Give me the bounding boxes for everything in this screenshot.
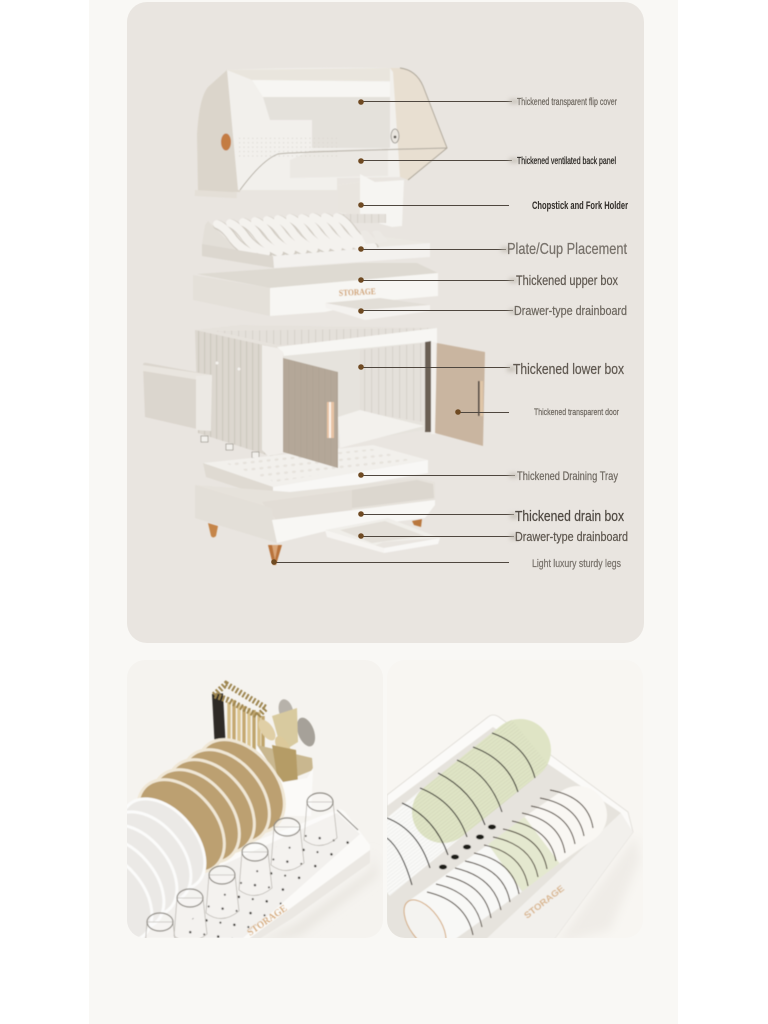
label: flip cover: Thickened transparent flip cover: [517, 97, 617, 108]
label glows: [501, 99, 519, 540]
chopsticks: [212, 684, 266, 752]
large cup ridges: [370, 742, 530, 872]
tray shadow: [280, 872, 372, 937]
label: lower box: Thickened lower box: [513, 361, 624, 378]
tray logo: STORAGE: [245, 903, 290, 938]
upper box logo: STORAGE: [339, 286, 376, 298]
leader dots: [271, 99, 461, 565]
cutlery and utensil cup: [255, 698, 319, 816]
large cup stack white: [370, 812, 443, 872]
leader lines: [274, 102, 515, 562]
chopstick and fork holder: [338, 174, 404, 227]
transparent door open right: [435, 343, 485, 446]
panel: exploded product diagram: [127, 2, 644, 643]
tray: [188, 809, 370, 938]
exploded view illustration: [143, 68, 485, 565]
flip cover and ventilated back panel: [195, 68, 447, 198]
large cup seams: [387, 733, 535, 885]
label: sturdy legs: Light luxury sturdy legs: [532, 558, 621, 570]
label: upper drainboard: Drawer-type drainboard: [514, 304, 627, 318]
large cup stack green: [443, 750, 520, 812]
plate and cup rack: [202, 217, 430, 268]
label: chopstick holder: Chopstick and Fork Holder: [532, 200, 628, 212]
small cup seams: [427, 790, 593, 935]
upper drawer drainboard: [325, 298, 430, 320]
page background: [89, 0, 678, 1024]
label: back panel: Thickened ventilated back panel: [517, 156, 616, 167]
label: draining tray: Thickened Draining Tray: [517, 469, 618, 483]
label: upper box: Thickened upper box: [516, 272, 618, 288]
drain holes: [439, 824, 496, 870]
label: transparent door: Thickened transparent door: [534, 407, 619, 418]
white plates: [127, 796, 208, 938]
side utensil holder: [143, 363, 212, 432]
lower box: [195, 325, 437, 458]
lower drawer drainboard: [325, 518, 440, 553]
label: lower drainboard: Drawer-type drainboard: [515, 530, 628, 544]
small cup end: [403, 898, 447, 938]
small cup stack: [425, 815, 578, 925]
panel: photo of plates, glasses and utensils: [127, 680, 382, 938]
upper box: [193, 263, 438, 316]
tray shadow: [569, 849, 636, 936]
tray logo: STORAGE: [522, 883, 566, 921]
glass rims: [147, 793, 333, 931]
label: plate and cup placement: Plate/Cup Placement: [507, 241, 627, 258]
tray: [387, 715, 633, 945]
draining tray: [203, 445, 428, 499]
label: drain box: Thickened drain box: [515, 508, 624, 525]
tan plates: [138, 737, 286, 873]
panel: photo of bowls in tray: [387, 714, 640, 938]
drain box: [195, 478, 435, 543]
legs: [208, 519, 422, 565]
transparent door front left: [283, 358, 338, 468]
glasses: [145, 801, 338, 938]
